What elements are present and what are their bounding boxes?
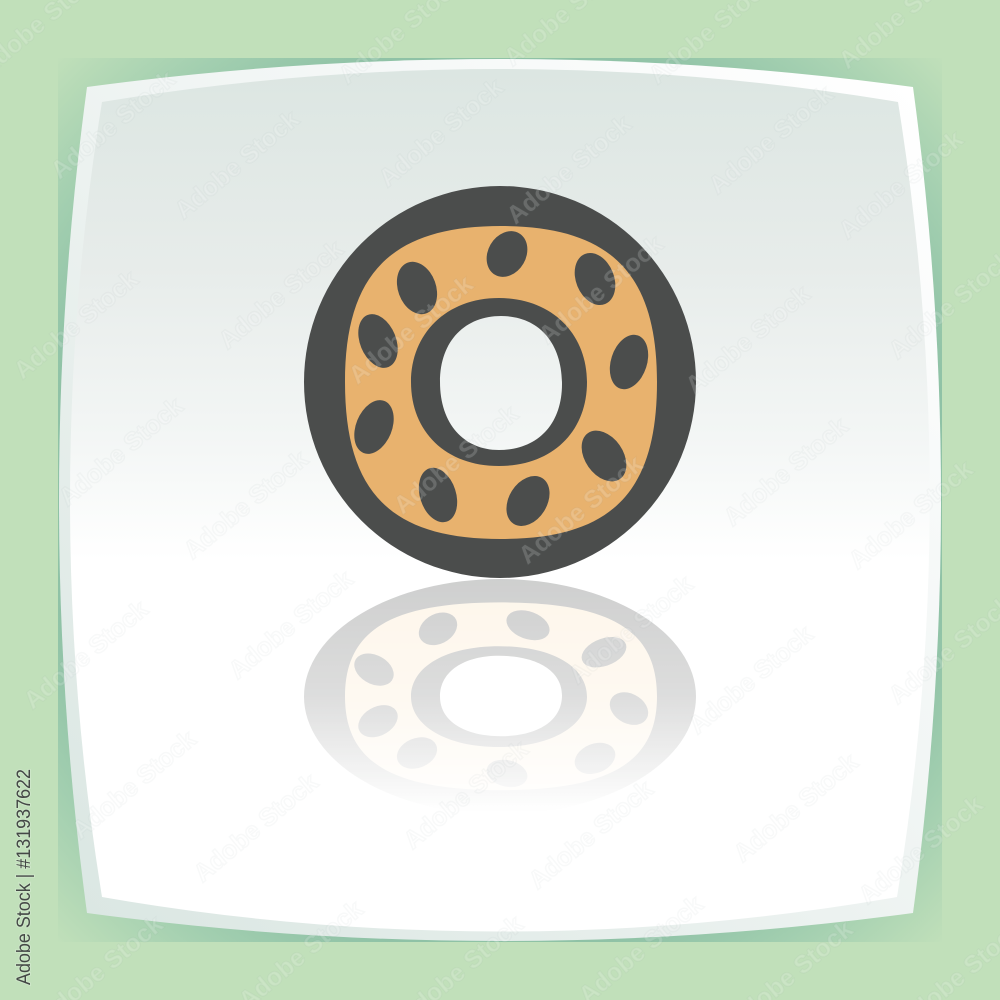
watermarks: Adobe Stock — [513, 450, 648, 570]
watermarks: Adobe Stock — [563, 570, 698, 690]
plate inner panel — [70, 69, 930, 932]
icon: bagel reflection — [304, 579, 696, 783]
watermarks: Adobe Stock — [223, 565, 358, 685]
watermarks: Adobe Stock — [178, 445, 313, 565]
watermarks: Adobe Stock — [373, 73, 508, 193]
watermarks: Adobe Stock — [833, 125, 968, 245]
bagel dough — [345, 226, 657, 539]
watermarks: Adobe Stock — [188, 768, 323, 888]
watermarks: Adobe Stock — [718, 412, 853, 532]
plate shadow square — [58, 58, 942, 942]
watermarks: Adobe Stock — [853, 790, 988, 910]
stock id caption: Adobe Stock | #131937622 — [14, 769, 35, 985]
watermarks: Adobe Stock — [213, 235, 348, 355]
watermarks: Adobe Stock — [680, 280, 815, 400]
watermarks: Adobe Stock — [18, 595, 153, 715]
watermarks: Adobe Stock — [501, 110, 636, 230]
watermarks: Adobe Stock — [523, 775, 658, 895]
watermarks: Adobe Stock — [843, 455, 978, 575]
watermarks: Adobe Stock — [169, 105, 304, 225]
bagel dark rim — [304, 186, 696, 578]
watermarks: Adobe Stock — [533, 230, 668, 350]
plate frame — [59, 59, 941, 941]
watermarks: Adobe Stock — [8, 265, 143, 385]
watermarks: Adobe Stock — [398, 735, 533, 855]
watermarks: Adobe Stock — [343, 270, 478, 390]
icon: bagel — [304, 186, 696, 578]
watermarks: Adobe Stock — [53, 392, 188, 512]
watermarks: Adobe Stock — [45, 65, 180, 185]
watermarks: Adobe Stock — [66, 725, 201, 845]
watermarks: Adobe Stock — [703, 80, 838, 200]
bagel seeds — [347, 224, 655, 534]
watermarks: Adobe Stock — [728, 748, 863, 868]
watermarks: Adobe Stock — [388, 400, 523, 520]
watermarks: Adobe Stock — [683, 620, 818, 740]
